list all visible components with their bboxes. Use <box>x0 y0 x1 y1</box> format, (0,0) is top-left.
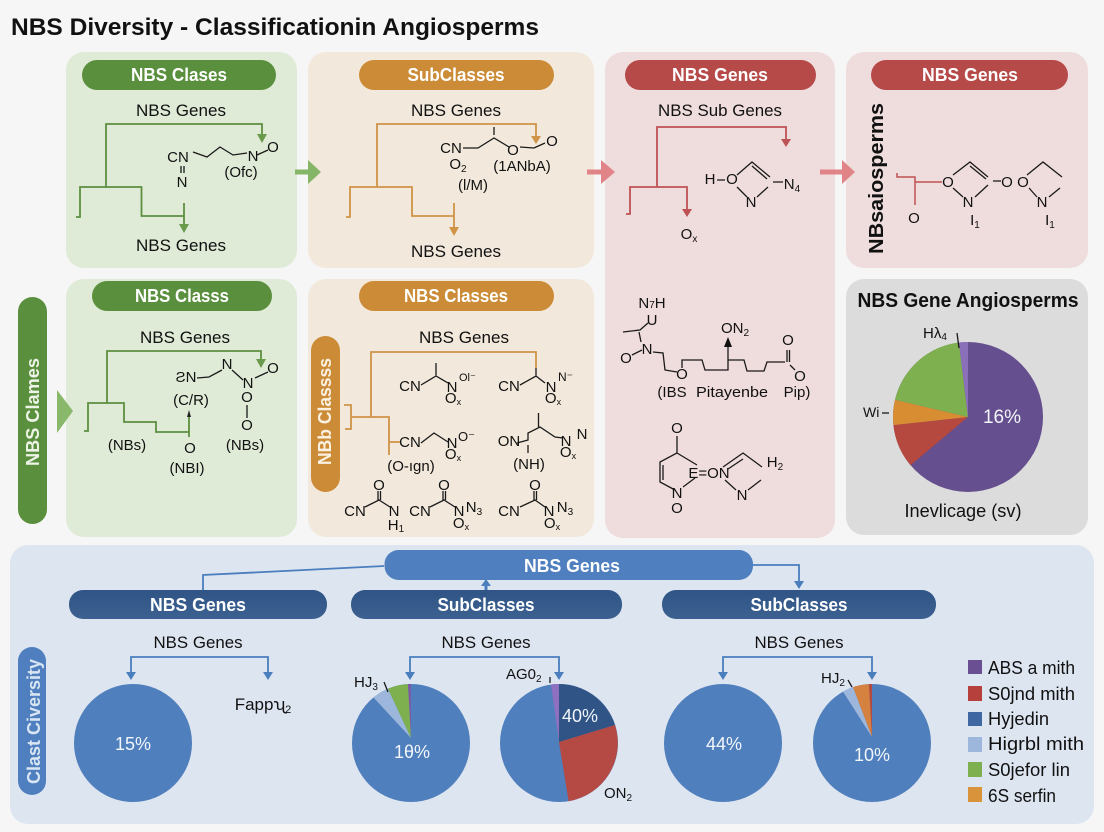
pie labels: 4 <box>941 332 947 343</box>
label: NBS Genes <box>140 328 230 347</box>
molecule: O <box>507 142 519 159</box>
pie 3: ON <box>604 785 626 802</box>
molecule: chain <box>620 295 810 401</box>
molecule grid: O <box>544 515 556 532</box>
pie 5: 10% <box>854 745 890 765</box>
side pill <box>311 336 340 492</box>
molecule grid: N <box>561 433 571 450</box>
molecule grid: O <box>560 444 572 461</box>
pie 3: 40% <box>562 706 598 726</box>
pill heading <box>871 60 1068 90</box>
molecule <box>440 127 558 194</box>
molecule: (l/M) <box>458 177 488 194</box>
arrow: red left <box>587 160 615 184</box>
molecule grid: N <box>577 426 587 443</box>
legend: S0jefor lin <box>988 760 1070 780</box>
pie 3: AG0 <box>506 666 536 683</box>
pill heading: NBS Genes <box>922 65 1018 85</box>
molecule grid: CN <box>399 378 421 395</box>
molecule grid: CN <box>344 503 366 520</box>
pie labels: Hλ <box>923 325 941 342</box>
pill: SubClasses right <box>662 590 936 619</box>
panel: blue class diversity <box>10 545 1094 824</box>
molecule grid: N <box>447 435 457 452</box>
tree diagram <box>344 352 536 455</box>
molecule: N <box>746 194 756 211</box>
pie 2: 3 <box>372 682 378 693</box>
molecule: chain: N <box>642 341 652 358</box>
pie 3: 2 <box>626 793 632 804</box>
molecules: I <box>1045 212 1049 229</box>
labels: NBS Genes <box>442 633 530 652</box>
legend: ABS a mith <box>988 658 1075 678</box>
pie 2 <box>352 674 470 802</box>
molecule: ring: O <box>671 420 683 437</box>
molecules: 1 <box>974 220 980 231</box>
pill: SubClasses right: SubClasses <box>750 595 848 615</box>
molecule grid: O <box>445 446 457 463</box>
molecule: O <box>241 417 253 434</box>
pill heading <box>625 60 816 90</box>
molecule: (NBs) <box>108 437 146 454</box>
labels: NBS Genes <box>154 633 242 652</box>
label: NBS Genes <box>136 101 226 120</box>
molecule: ring: O <box>671 500 683 517</box>
molecule: ring: E=ON <box>688 465 730 482</box>
molecule: H <box>705 171 715 188</box>
molecule grid: H <box>388 517 399 534</box>
pie 5 <box>813 670 931 802</box>
side pill: Clast Civersity <box>24 659 44 784</box>
molecule grid: CN <box>399 434 421 451</box>
panel: red tall sub genes <box>605 52 835 538</box>
molecule: (NBI) <box>170 460 204 477</box>
label: NBS Genes <box>136 236 226 255</box>
pill heading: NBS Genes <box>672 65 768 85</box>
molecule grid: N <box>454 503 464 520</box>
molecule grid: x <box>557 397 562 407</box>
legend: Hyjedin <box>988 709 1049 729</box>
pill heading <box>359 60 554 90</box>
pie 4: 44% <box>706 734 742 754</box>
pie 3 <box>500 666 632 804</box>
molecule grid: 1 <box>399 524 405 535</box>
label: 2 <box>285 704 291 716</box>
panel: green classes bottom <box>66 279 297 537</box>
molecule grid: CN <box>498 378 520 395</box>
fragment <box>897 173 942 227</box>
molecule: N <box>243 375 253 392</box>
molecules: N <box>1037 194 1047 211</box>
molecule: O <box>546 133 558 150</box>
molecule grid: O <box>453 515 465 532</box>
molecule grid: N⁻ <box>558 370 573 384</box>
molecule: O <box>726 171 738 188</box>
molecule: O <box>267 139 279 156</box>
panel: tan subclasses top <box>308 52 594 268</box>
arrow: green <box>295 160 321 184</box>
arrow: green triangle <box>57 390 73 433</box>
panel: red angiosperms <box>846 52 1088 268</box>
molecule: N <box>177 174 187 191</box>
tree diagram <box>626 127 791 245</box>
molecule grid: 3 <box>477 507 483 518</box>
tree diagram: x <box>692 234 697 245</box>
molecule grid: N <box>546 379 556 396</box>
tree arrows <box>126 657 877 680</box>
tree diagram <box>84 351 266 437</box>
pill: NBS Genes <box>69 590 327 619</box>
pie 5: HJ <box>821 670 839 687</box>
side pill: NBS Clames <box>18 297 47 524</box>
molecule: chain: O <box>676 366 688 383</box>
molecule: chain: ON <box>721 320 743 337</box>
pill: SubClasses: SubClasses <box>438 595 534 615</box>
molecule: N <box>248 148 258 165</box>
molecule: chain: O <box>794 368 806 385</box>
label: NBS Genes <box>411 101 501 120</box>
molecule grid: CN <box>409 503 431 520</box>
pill heading: NBS Classs <box>135 286 229 306</box>
molecule: O <box>267 360 279 377</box>
molecule grid: N <box>557 499 568 516</box>
molecule: chain: (IBS <box>657 384 687 401</box>
pie 5: 2 <box>839 678 845 689</box>
molecule: CN <box>440 140 462 157</box>
molecule: O <box>449 156 461 173</box>
labels <box>154 633 844 652</box>
molecule: ring: H <box>767 454 778 471</box>
pill: NBS Genes: NBS Genes <box>150 595 246 615</box>
molecule: (C/R) <box>173 392 209 409</box>
molecule grid: x <box>465 522 470 532</box>
side pill: NBS Clames: NBS Clames <box>23 358 43 466</box>
molecule: ring: N <box>672 485 682 502</box>
molecule: (1ANbA) <box>493 158 551 175</box>
vertical label: NBsaiosperms <box>866 103 888 254</box>
molecule grid: O⁻ <box>458 429 475 444</box>
molecule: chain: O <box>782 332 794 349</box>
panel: grey pie <box>846 279 1088 535</box>
molecule: N <box>784 176 795 193</box>
molecule grid: N <box>466 499 477 516</box>
pie 1 <box>74 684 192 802</box>
legend: S0jnd mith <box>988 684 1075 704</box>
label: NBS Genes <box>411 242 501 261</box>
molecule: ring <box>660 420 784 517</box>
legend <box>968 658 1084 806</box>
molecule: O <box>184 440 196 457</box>
molecule grid: N <box>389 503 399 520</box>
label: NBS Sub Genes <box>658 101 782 120</box>
legend: 6S serfin <box>988 786 1056 806</box>
molecule: ring: 2 <box>778 462 784 473</box>
tree diagram: O <box>681 226 692 243</box>
top pill <box>384 550 753 580</box>
panel: green classes top <box>66 52 297 268</box>
molecule: (Ofc) <box>224 164 258 181</box>
molecule grid: ON <box>498 433 520 450</box>
pill heading: NBS Clases <box>131 65 227 85</box>
pie 2: 1θ% <box>394 742 430 762</box>
molecule: chain: O <box>620 350 632 367</box>
side pill: NBb Classss <box>315 358 335 465</box>
molecule: chain: Pitayenbe <box>696 384 768 401</box>
molecule: chain: Pip) <box>784 384 810 401</box>
molecule: O <box>241 389 253 406</box>
molecule grid: N <box>447 379 457 396</box>
labels: NBS Genes <box>754 633 844 652</box>
molecule <box>108 356 279 477</box>
molecules <box>942 162 1062 231</box>
molecule: chain: 2 <box>743 328 749 339</box>
molecules: N <box>963 194 973 211</box>
molecule grid: x <box>457 397 462 407</box>
molecules: O <box>942 174 954 191</box>
pie 4 <box>664 684 782 802</box>
molecule grid: (NH) <box>513 456 545 473</box>
pie labels: Wi <box>863 404 879 420</box>
molecule grid: x <box>556 522 561 532</box>
caption: Inevlicage (sv) <box>904 501 1022 521</box>
side pill <box>18 647 46 795</box>
top pill: NBS Genes <box>524 556 620 576</box>
pill: SubClasses <box>351 590 622 619</box>
title: NBS Diversity - Classificationin Angiosperms <box>11 14 539 41</box>
molecule grid: CN <box>498 503 520 520</box>
molecule: ƧN <box>176 369 196 386</box>
molecule grid: O <box>438 477 450 494</box>
molecule grid: O <box>545 390 557 407</box>
heading: NBS Gene Angiosperms <box>858 290 1078 312</box>
molecules: I <box>970 212 974 229</box>
tree diagram <box>346 124 541 236</box>
molecules: O <box>1001 174 1013 191</box>
panel: tan classes bottom <box>308 279 594 537</box>
pie labels <box>863 325 959 420</box>
molecule: CN <box>167 149 189 166</box>
label: NBS Genes <box>419 328 509 347</box>
molecule: chain: U <box>647 312 657 329</box>
molecule grid: 3 <box>568 507 574 518</box>
tree diagram <box>76 124 267 233</box>
label: Fappʯ <box>235 695 285 714</box>
molecules: 1 <box>1049 220 1055 231</box>
molecule grid: Ol⁻ <box>459 372 476 384</box>
molecule grid <box>344 363 587 535</box>
molecule: 4 <box>795 184 801 195</box>
molecules: O <box>1017 174 1029 191</box>
molecule grid: x <box>457 453 462 463</box>
legend: Higrbl mith <box>988 734 1084 754</box>
pie 1: 15% <box>115 734 151 754</box>
molecule grid: (O-ıgn) <box>387 458 435 475</box>
molecule grid: x <box>572 451 577 461</box>
pie 2: HJ <box>354 674 372 691</box>
molecule grid: O <box>445 390 457 407</box>
molecule grid: O <box>373 477 385 494</box>
molecule: (NBs) <box>226 437 264 454</box>
pill heading <box>92 281 272 311</box>
molecule grid: O <box>529 477 541 494</box>
pie chart: 16% <box>983 407 1021 428</box>
molecule grid: N <box>544 503 554 520</box>
molecule: ring: N <box>737 487 747 504</box>
pill heading: SubClasses <box>408 65 504 85</box>
pie 3: 2 <box>536 674 542 685</box>
pill heading <box>359 281 554 311</box>
molecule: 2 <box>461 164 467 175</box>
molecule <box>705 162 801 211</box>
molecule <box>167 139 279 191</box>
arrow: red right <box>820 160 855 184</box>
pill heading <box>82 60 276 90</box>
pie chart <box>893 342 1043 492</box>
fragment: O <box>908 210 920 227</box>
connectors <box>203 565 804 590</box>
molecule: chain: N7H <box>638 295 666 312</box>
molecule: N <box>222 356 232 373</box>
pill heading: NBS Classes <box>404 286 508 306</box>
